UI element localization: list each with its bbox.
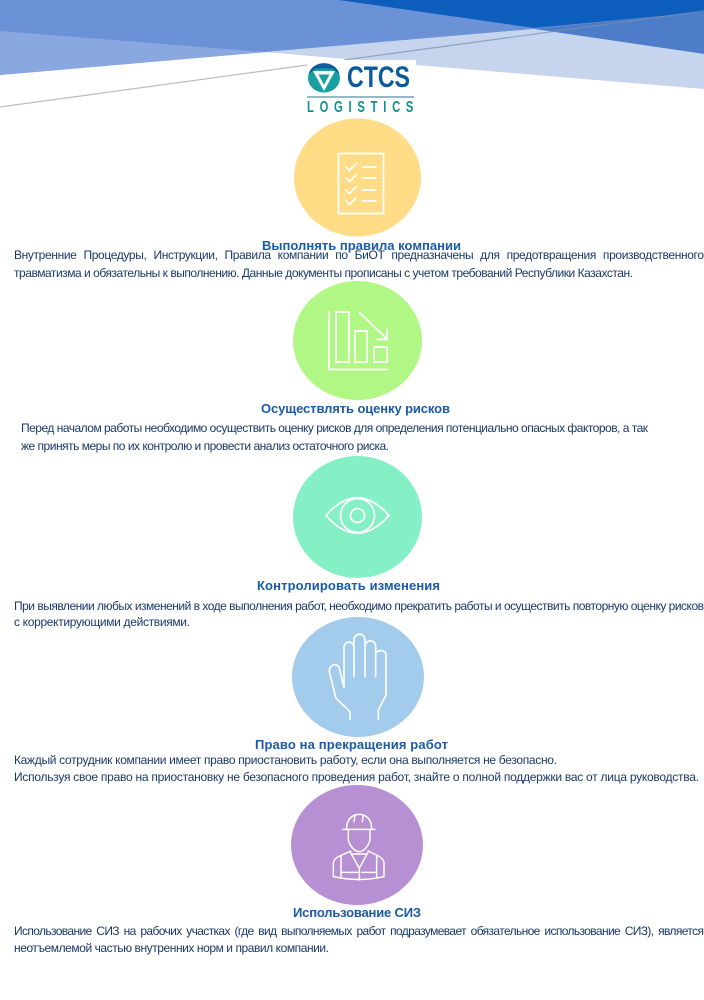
text block: Используя свое право на приостановку не безопасного проведения работ, знайте о полной поддержки вас от лица руководства.	[14, 770, 699, 784]
text block: Внутренние Процедуры, Инструкции, Правила компании по БиОТ предназначены для предотвращения производственного	[14, 248, 704, 262]
text block	[14, 924, 704, 955]
text block	[14, 248, 704, 280]
text block: травматизма и обязательны к выполнению. Данные документы прописаны с учетом требований Республики Казахстан.	[14, 266, 633, 280]
text block	[21, 421, 649, 453]
heading: Использование СИЗ	[293, 905, 421, 920]
text block: с корректирующими действиями.	[14, 615, 190, 629]
text block: же принять меры по их контролю и провести анализ остаточного риска.	[21, 439, 389, 453]
section 2: risk assessment	[21, 281, 649, 453]
section 4: right to stop work	[14, 617, 699, 784]
icon: worker in helmet	[291, 785, 423, 905]
heading: Осуществлять оценку рисков	[261, 401, 450, 416]
section 1: company rules	[14, 118, 704, 280]
heading: Право на прекращения работ	[255, 737, 448, 752]
icon: eye	[293, 456, 422, 578]
icon: falling bar chart	[293, 281, 422, 400]
logo subtitle: LOGISTICS	[307, 97, 413, 115]
text block: Перед началом работы необходимо осуществить оценку рисков для определения потенциально опасных факторов, а так	[21, 421, 649, 435]
logo wordmark: CTCS	[347, 61, 410, 94]
heading: Контролировать изменения	[257, 578, 440, 593]
icon: raised hand	[292, 617, 424, 737]
text block: При выявлении любых изменений в ходе выполнения работ, необходимо прекратить работы и осуществить повторную оценку рисков	[14, 599, 704, 613]
icon: checklist	[294, 118, 421, 236]
heading: Выполнять правила компании	[262, 238, 461, 253]
text block	[14, 753, 699, 784]
text block: Использование СИЗ на рабочих участках (где вид выполняемых работ подразумевает обязательное использование СИЗ), является	[14, 924, 704, 938]
icon: logo emblem	[308, 63, 340, 92]
text block	[14, 599, 704, 629]
text block: Каждый сотрудник компании имеет право приостановить работу, если она выполняется не безопасно.	[14, 753, 557, 767]
header banner	[0, 0, 704, 107]
section 3: control changes	[14, 456, 704, 629]
logo: CTCS Logistics	[307, 60, 416, 115]
section 5: PPE	[14, 785, 704, 955]
text block: неотъемлемой частью внутренних норм и правил компании.	[14, 941, 329, 955]
